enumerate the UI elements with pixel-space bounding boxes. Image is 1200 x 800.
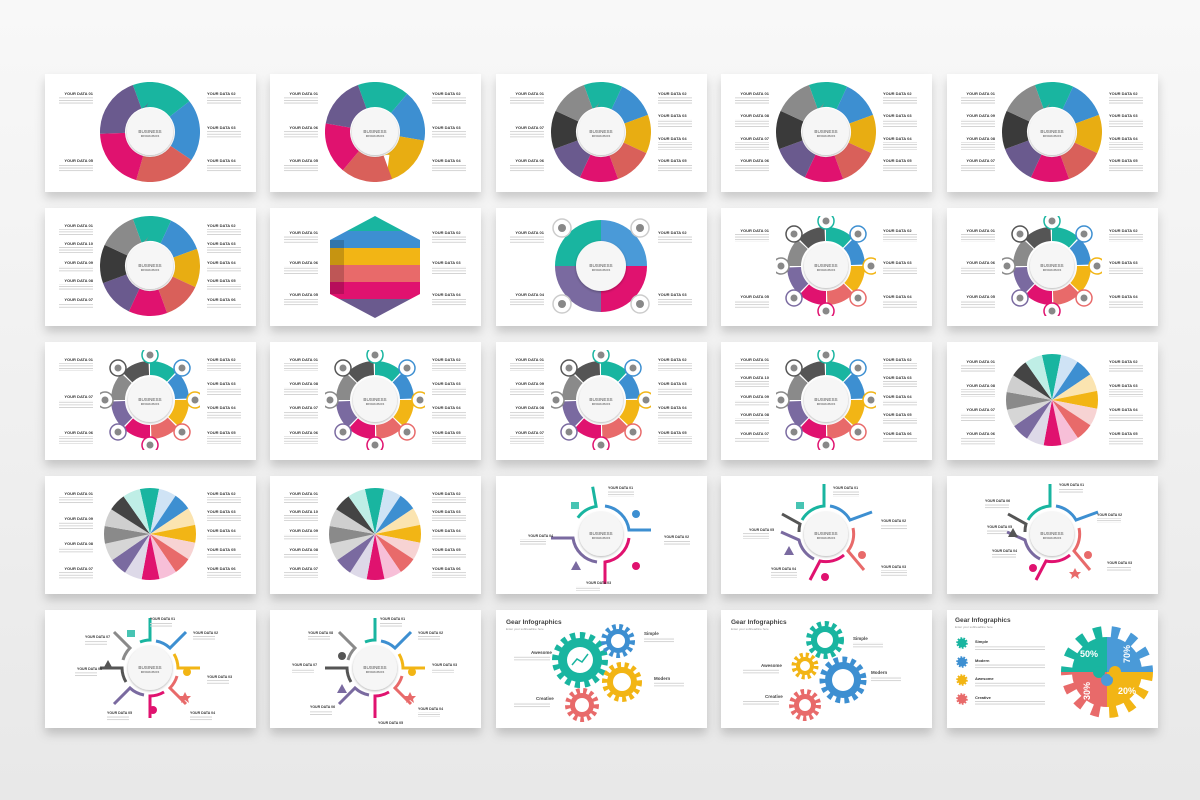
ring: BUSINESS xyxy=(814,397,838,402)
labels: Modern xyxy=(871,670,888,675)
slide 23: gear infographics 1 xyxy=(496,610,707,728)
labels: YOUR DATA 07 xyxy=(64,297,94,302)
labels: YOUR DATA 03 xyxy=(432,125,461,130)
labels: YOUR DATA 05 xyxy=(207,430,236,435)
labels: YOUR DATA 08 xyxy=(64,541,94,546)
labels: YOUR DATA 02 xyxy=(207,357,236,362)
slide 4: 8-segment swirl xyxy=(721,74,932,192)
slide 19: 5 spokes xyxy=(721,476,932,594)
labels: YOUR DATA 06 xyxy=(310,705,335,709)
title: Enter your subheadline here xyxy=(506,627,544,631)
labels: YOUR DATA 05 xyxy=(289,158,319,163)
labels: YOUR DATA 06 xyxy=(64,430,94,435)
labels: YOUR DATA 06 xyxy=(289,260,319,265)
sunburst chart xyxy=(123,507,177,561)
ring: BUSINESS xyxy=(589,397,613,402)
labels: YOUR DATA 03 xyxy=(207,125,236,130)
labels: YOUR DATA 04 xyxy=(432,405,461,410)
slide 20: 6 spokes xyxy=(947,476,1158,594)
wheel: INFOGRAPHICS xyxy=(141,269,160,272)
ring xyxy=(553,219,649,313)
labels: Creative xyxy=(765,694,783,699)
labels: YOUR DATA 04 xyxy=(658,136,687,141)
labels: YOUR DATA 06 xyxy=(515,158,545,163)
labels: YOUR DATA 03 xyxy=(881,565,906,569)
labels: YOUR DATA 03 xyxy=(207,381,236,386)
labels xyxy=(966,91,1138,163)
ring xyxy=(999,213,1105,319)
labels: YOUR DATA 01 xyxy=(966,228,996,233)
labels xyxy=(740,91,912,163)
slide 12: 8-part ring xyxy=(270,342,481,460)
labels: Awesome xyxy=(761,663,782,668)
labels: YOUR DATA 02 xyxy=(883,228,912,233)
labels: Creative xyxy=(536,696,554,701)
labels: YOUR DATA 02 xyxy=(883,357,912,362)
spokes diagram xyxy=(551,487,651,584)
labels: YOUR DATA 03 xyxy=(432,260,461,265)
labels: YOUR DATA 07 xyxy=(292,663,317,667)
labels: YOUR DATA 02 xyxy=(658,91,687,96)
wheel: INFOGRAPHICS xyxy=(366,135,385,138)
labels: YOUR DATA 04 xyxy=(418,707,443,711)
title: Enter your subheadline here xyxy=(731,627,769,631)
wheel xyxy=(102,84,198,180)
labels: YOUR DATA 04 xyxy=(1109,136,1138,141)
labels: YOUR DATA 05 xyxy=(432,430,461,435)
wheel: BUSINESS xyxy=(138,263,162,268)
legend: Simple xyxy=(975,639,989,644)
labels: YOUR DATA 04 xyxy=(1109,407,1138,412)
labels: YOUR DATA 01 xyxy=(289,230,319,235)
puzzle gear chart xyxy=(1067,632,1147,712)
labels: YOUR DATA 08 xyxy=(740,412,770,417)
labels: YOUR DATA 05 xyxy=(1109,158,1138,163)
labels: YOUR DATA 09 xyxy=(64,516,94,521)
slide 22: 8 spokes xyxy=(270,610,481,728)
labels: YOUR DATA 08 xyxy=(966,136,996,141)
labels: YOUR DATA 07 xyxy=(64,566,94,571)
labels: YOUR DATA 04 xyxy=(207,260,236,265)
labels: YOUR DATA 03 xyxy=(207,675,232,679)
wheel xyxy=(778,84,874,180)
labels: YOUR DATA 02 xyxy=(432,491,461,496)
labels xyxy=(292,617,457,725)
spokes diagram xyxy=(781,484,872,581)
labels: YOUR DATA 02 xyxy=(658,230,687,235)
wheel xyxy=(553,84,649,180)
slide 2: 6-segment swirl xyxy=(270,74,481,192)
wheel: BUSINESS xyxy=(814,129,838,134)
labels: YOUR DATA 01 xyxy=(515,91,545,96)
spokes diagram xyxy=(1007,484,1098,580)
labels xyxy=(64,91,236,163)
slide 16: sunburst 2 xyxy=(45,476,256,594)
ring: BUSINESS xyxy=(363,397,387,402)
wheel: INFOGRAPHICS xyxy=(592,135,611,138)
labels: YOUR DATA 05 xyxy=(107,711,132,715)
slide 1: 5-segment swirl xyxy=(45,74,256,192)
labels: YOUR DATA 07 xyxy=(289,405,319,410)
labels: YOUR DATA 02 xyxy=(207,91,236,96)
labels: YOUR DATA 05 xyxy=(883,158,912,163)
slide 3: 7-segment swirl xyxy=(496,74,707,192)
labels xyxy=(749,486,906,571)
labels: YOUR DATA 01 xyxy=(289,357,319,362)
labels: YOUR DATA 08 xyxy=(308,631,333,635)
slide 24: gear infographics 2 xyxy=(721,610,932,728)
labels xyxy=(966,359,1138,436)
gears xyxy=(792,624,863,718)
ring: INFOGRAPHICS xyxy=(366,403,385,406)
ring: BUSINESS xyxy=(814,263,838,268)
slide 10: 6-part ring xyxy=(947,208,1158,326)
labels: YOUR DATA 01 xyxy=(289,491,319,496)
labels: YOUR DATA 01 xyxy=(1059,483,1084,487)
slide 7: hexagon stack xyxy=(270,208,481,326)
slide 8: 4-part ring xyxy=(496,208,707,326)
title xyxy=(506,619,562,631)
labels xyxy=(515,357,687,435)
gears xyxy=(556,627,639,719)
slide 15: sunburst xyxy=(947,342,1158,460)
labels: YOUR DATA 09 xyxy=(966,113,996,118)
labels: YOUR DATA 03 xyxy=(883,375,912,380)
slide 17: sunburst 3 xyxy=(270,476,481,594)
labels xyxy=(289,491,461,571)
labels: YOUR DATA 06 xyxy=(883,431,912,436)
labels: YOUR DATA 01 xyxy=(740,357,770,362)
labels: YOUR DATA 06 xyxy=(966,431,996,436)
ring: INFOGRAPHICS xyxy=(817,403,836,406)
labels: YOUR DATA 01 xyxy=(64,223,94,228)
labels: YOUR DATA 04 xyxy=(992,549,1017,553)
labels: YOUR DATA 04 xyxy=(528,534,553,538)
slide 5: 9-segment swirl xyxy=(947,74,1158,192)
labels: YOUR DATA 05 xyxy=(207,278,236,283)
labels: YOUR DATA 02 xyxy=(207,223,236,228)
puzzle gear chart: 70% xyxy=(1122,645,1132,663)
spokes diagram: BUSINESS xyxy=(1040,531,1064,536)
labels: YOUR DATA 05 xyxy=(966,294,996,299)
labels: YOUR DATA 01 xyxy=(740,91,770,96)
labels xyxy=(528,486,689,585)
slide 18: 4 spokes xyxy=(496,476,707,594)
labels: Modern xyxy=(654,676,670,681)
labels: YOUR DATA 03 xyxy=(658,113,687,118)
labels: YOUR DATA 03 xyxy=(883,260,912,265)
wheel: INFOGRAPHICS xyxy=(1043,135,1062,138)
labels: YOUR DATA 04 xyxy=(207,405,236,410)
labels: YOUR DATA 07 xyxy=(740,431,770,436)
labels xyxy=(289,230,461,297)
labels: YOUR DATA 09 xyxy=(289,528,319,533)
labels: YOUR DATA 05 xyxy=(207,547,236,552)
title: Gear Infographics xyxy=(506,619,562,626)
labels: YOUR DATA 03 xyxy=(432,663,457,667)
ring: BUSINESS xyxy=(589,263,613,268)
spokes diagram: INFOGRAPHICS xyxy=(1043,537,1062,540)
ring xyxy=(773,347,879,453)
labels: YOUR DATA 04 xyxy=(432,292,461,297)
labels: YOUR DATA 06 xyxy=(432,566,461,571)
wheel: INFOGRAPHICS xyxy=(817,135,836,138)
labels: YOUR DATA 07 xyxy=(289,566,319,571)
labels: YOUR DATA 05 xyxy=(658,430,687,435)
labels: YOUR DATA 04 xyxy=(883,294,912,299)
labels: YOUR DATA 01 xyxy=(380,617,405,621)
ring: INFOGRAPHICS xyxy=(592,269,611,272)
labels: YOUR DATA 01 xyxy=(608,486,633,490)
spokes diagram: INFOGRAPHICS xyxy=(592,537,611,540)
spokes diagram xyxy=(100,618,200,718)
labels: YOUR DATA 05 xyxy=(289,292,319,297)
labels: YOUR DATA 05 xyxy=(378,721,403,725)
slide 9: 5-part ring xyxy=(721,208,932,326)
ring: BUSINESS xyxy=(1040,263,1064,268)
labels: YOUR DATA 06 xyxy=(207,297,236,302)
slide 11: 7-part ring xyxy=(45,342,256,460)
labels xyxy=(289,91,461,163)
labels: YOUR DATA 02 xyxy=(883,91,912,96)
labels: YOUR DATA 10 xyxy=(289,509,319,514)
labels xyxy=(740,357,912,436)
labels: YOUR DATA 03 xyxy=(883,113,912,118)
labels: YOUR DATA 05 xyxy=(987,525,1012,529)
wheel: BUSINESS xyxy=(589,129,613,134)
slide 21: 7 spokes xyxy=(45,610,256,728)
labels: YOUR DATA 03 xyxy=(1109,383,1138,388)
slide 13: 9-part ring xyxy=(496,342,707,460)
labels: YOUR DATA 04 xyxy=(883,136,912,141)
labels: YOUR DATA 04 xyxy=(207,528,236,533)
labels: YOUR DATA 10 xyxy=(64,241,94,246)
labels xyxy=(985,483,1132,565)
legend: Modern xyxy=(975,658,990,663)
labels: YOUR DATA 04 xyxy=(1109,294,1138,299)
labels: YOUR DATA 04 xyxy=(190,711,215,715)
labels: YOUR DATA 04 xyxy=(515,292,545,297)
labels: YOUR DATA 08 xyxy=(966,383,996,388)
ring: INFOGRAPHICS xyxy=(817,269,836,272)
legend: Awesome xyxy=(975,676,994,681)
wheel: BUSINESS xyxy=(363,129,387,134)
spokes diagram: BUSINESS xyxy=(589,531,613,536)
labels: YOUR DATA 01 xyxy=(515,357,545,362)
puzzle gear chart: 20% xyxy=(1118,686,1136,696)
labels xyxy=(966,228,1138,299)
labels xyxy=(761,636,888,699)
labels: YOUR DATA 03 xyxy=(207,241,236,246)
labels: YOUR DATA 05 xyxy=(64,158,94,163)
spokes diagram: INFOGRAPHICS xyxy=(141,671,160,674)
labels: YOUR DATA 05 xyxy=(740,294,770,299)
wheel xyxy=(102,218,198,314)
ring xyxy=(773,213,879,319)
ring: INFOGRAPHICS xyxy=(1043,269,1062,272)
labels: YOUR DATA 08 xyxy=(289,547,319,552)
labels: YOUR DATA 03 xyxy=(586,581,611,585)
title xyxy=(731,619,787,631)
labels: YOUR DATA 04 xyxy=(432,528,461,533)
labels: YOUR DATA 06 xyxy=(966,260,996,265)
labels: YOUR DATA 08 xyxy=(740,113,770,118)
spokes diagram xyxy=(325,618,425,718)
legend: Creative xyxy=(975,695,992,700)
labels: YOUR DATA 06 xyxy=(985,499,1010,503)
labels: Simple xyxy=(644,631,659,636)
labels: YOUR DATA 01 xyxy=(966,91,996,96)
labels: YOUR DATA 02 xyxy=(432,91,461,96)
labels: YOUR DATA 05 xyxy=(1109,431,1138,436)
slide 6: 10-segment swirl xyxy=(45,208,256,326)
labels: YOUR DATA 03 xyxy=(1109,113,1138,118)
puzzle gear chart: 30% xyxy=(1082,682,1092,700)
labels xyxy=(64,357,236,435)
labels: YOUR DATA 05 xyxy=(432,547,461,552)
hexagon xyxy=(328,214,423,319)
legend xyxy=(958,638,1045,706)
ring xyxy=(97,347,203,453)
sunburst chart xyxy=(1025,373,1079,427)
labels: YOUR DATA 04 xyxy=(658,405,687,410)
labels: YOUR DATA 01 xyxy=(289,91,319,96)
labels xyxy=(515,91,687,163)
puzzle gear chart: 50% xyxy=(1080,649,1098,659)
labels: YOUR DATA 03 xyxy=(432,509,461,514)
wheel: BUSINESS xyxy=(138,129,162,134)
labels: YOUR DATA 02 xyxy=(1109,359,1138,364)
ring: INFOGRAPHICS xyxy=(592,403,611,406)
labels: YOUR DATA 03 xyxy=(658,292,687,297)
labels: YOUR DATA 02 xyxy=(418,631,443,635)
labels: YOUR DATA 06 xyxy=(740,158,770,163)
ring: BUSINESS xyxy=(138,397,162,402)
labels: YOUR DATA 04 xyxy=(771,567,796,571)
labels: YOUR DATA 05 xyxy=(658,158,687,163)
spokes diagram: INFOGRAPHICS xyxy=(817,537,836,540)
labels: YOUR DATA 02 xyxy=(881,519,906,523)
slide 14: 10-part ring xyxy=(721,342,932,460)
title: Gear Infographics xyxy=(731,619,787,626)
ring xyxy=(322,347,428,453)
labels: YOUR DATA 03 xyxy=(658,381,687,386)
labels: YOUR DATA 05 xyxy=(749,528,774,532)
labels xyxy=(515,230,687,297)
labels: YOUR DATA 02 xyxy=(432,230,461,235)
labels: YOUR DATA 04 xyxy=(432,158,461,163)
sunburst chart xyxy=(348,507,402,561)
labels: YOUR DATA 02 xyxy=(193,631,218,635)
wheel: BUSINESS xyxy=(1040,129,1064,134)
labels: YOUR DATA 06 xyxy=(289,125,319,130)
labels: YOUR DATA 07 xyxy=(966,407,996,412)
labels: YOUR DATA 02 xyxy=(432,357,461,362)
labels: YOUR DATA 05 xyxy=(883,412,912,417)
title: Gear Infographics xyxy=(955,617,1011,624)
labels: YOUR DATA 01 xyxy=(833,486,858,490)
labels: YOUR DATA 02 xyxy=(658,357,687,362)
labels: YOUR DATA 03 xyxy=(207,509,236,514)
labels: YOUR DATA 02 xyxy=(1097,513,1122,517)
labels: YOUR DATA 06 xyxy=(289,430,319,435)
labels: YOUR DATA 02 xyxy=(1109,228,1138,233)
labels: YOUR DATA 06 xyxy=(77,667,102,671)
wheel xyxy=(327,84,423,180)
labels: YOUR DATA 07 xyxy=(85,635,110,639)
labels: YOUR DATA 04 xyxy=(207,158,236,163)
labels: Simple xyxy=(853,636,868,641)
labels xyxy=(64,491,236,571)
labels: YOUR DATA 07 xyxy=(740,136,770,141)
labels: YOUR DATA 03 xyxy=(432,381,461,386)
labels: YOUR DATA 07 xyxy=(966,158,996,163)
labels: YOUR DATA 04 xyxy=(883,394,912,399)
labels: YOUR DATA 03 xyxy=(1109,260,1138,265)
labels: YOUR DATA 08 xyxy=(289,381,319,386)
labels: YOUR DATA 01 xyxy=(64,357,94,362)
labels: YOUR DATA 03 xyxy=(1107,561,1132,565)
title: Enter your subheadline here xyxy=(955,625,993,629)
labels: YOUR DATA 01 xyxy=(740,228,770,233)
labels xyxy=(531,631,670,701)
labels: YOUR DATA 01 xyxy=(515,230,545,235)
labels xyxy=(740,228,912,299)
wheel xyxy=(1004,84,1100,180)
labels xyxy=(64,223,236,302)
labels: YOUR DATA 08 xyxy=(515,405,545,410)
spokes diagram: BUSINESS xyxy=(363,665,387,670)
labels: YOUR DATA 02 xyxy=(664,535,689,539)
labels: YOUR DATA 02 xyxy=(207,491,236,496)
labels: YOUR DATA 08 xyxy=(64,278,94,283)
labels: YOUR DATA 01 xyxy=(150,617,175,621)
labels xyxy=(289,357,461,435)
spokes diagram: BUSINESS xyxy=(814,531,838,536)
labels: YOUR DATA 09 xyxy=(740,394,770,399)
labels xyxy=(77,617,232,715)
labels: YOUR DATA 09 xyxy=(515,381,545,386)
labels: YOUR DATA 07 xyxy=(515,430,545,435)
wheel: INFOGRAPHICS xyxy=(141,135,160,138)
spokes diagram: INFOGRAPHICS xyxy=(366,671,385,674)
ring xyxy=(548,347,654,453)
labels: YOUR DATA 07 xyxy=(515,125,545,130)
labels: YOUR DATA 09 xyxy=(64,260,94,265)
labels: YOUR DATA 01 xyxy=(64,491,94,496)
slide 25: puzzle gear xyxy=(947,610,1158,728)
labels: YOUR DATA 06 xyxy=(207,566,236,571)
labels: YOUR DATA 07 xyxy=(64,394,94,399)
ring: INFOGRAPHICS xyxy=(141,403,160,406)
labels: Awesome xyxy=(531,650,552,655)
labels: YOUR DATA 01 xyxy=(64,91,94,96)
labels: YOUR DATA 10 xyxy=(740,375,770,380)
spokes diagram: BUSINESS xyxy=(138,665,162,670)
title xyxy=(955,617,1011,629)
labels: YOUR DATA 02 xyxy=(1109,91,1138,96)
labels: YOUR DATA 01 xyxy=(966,359,996,364)
